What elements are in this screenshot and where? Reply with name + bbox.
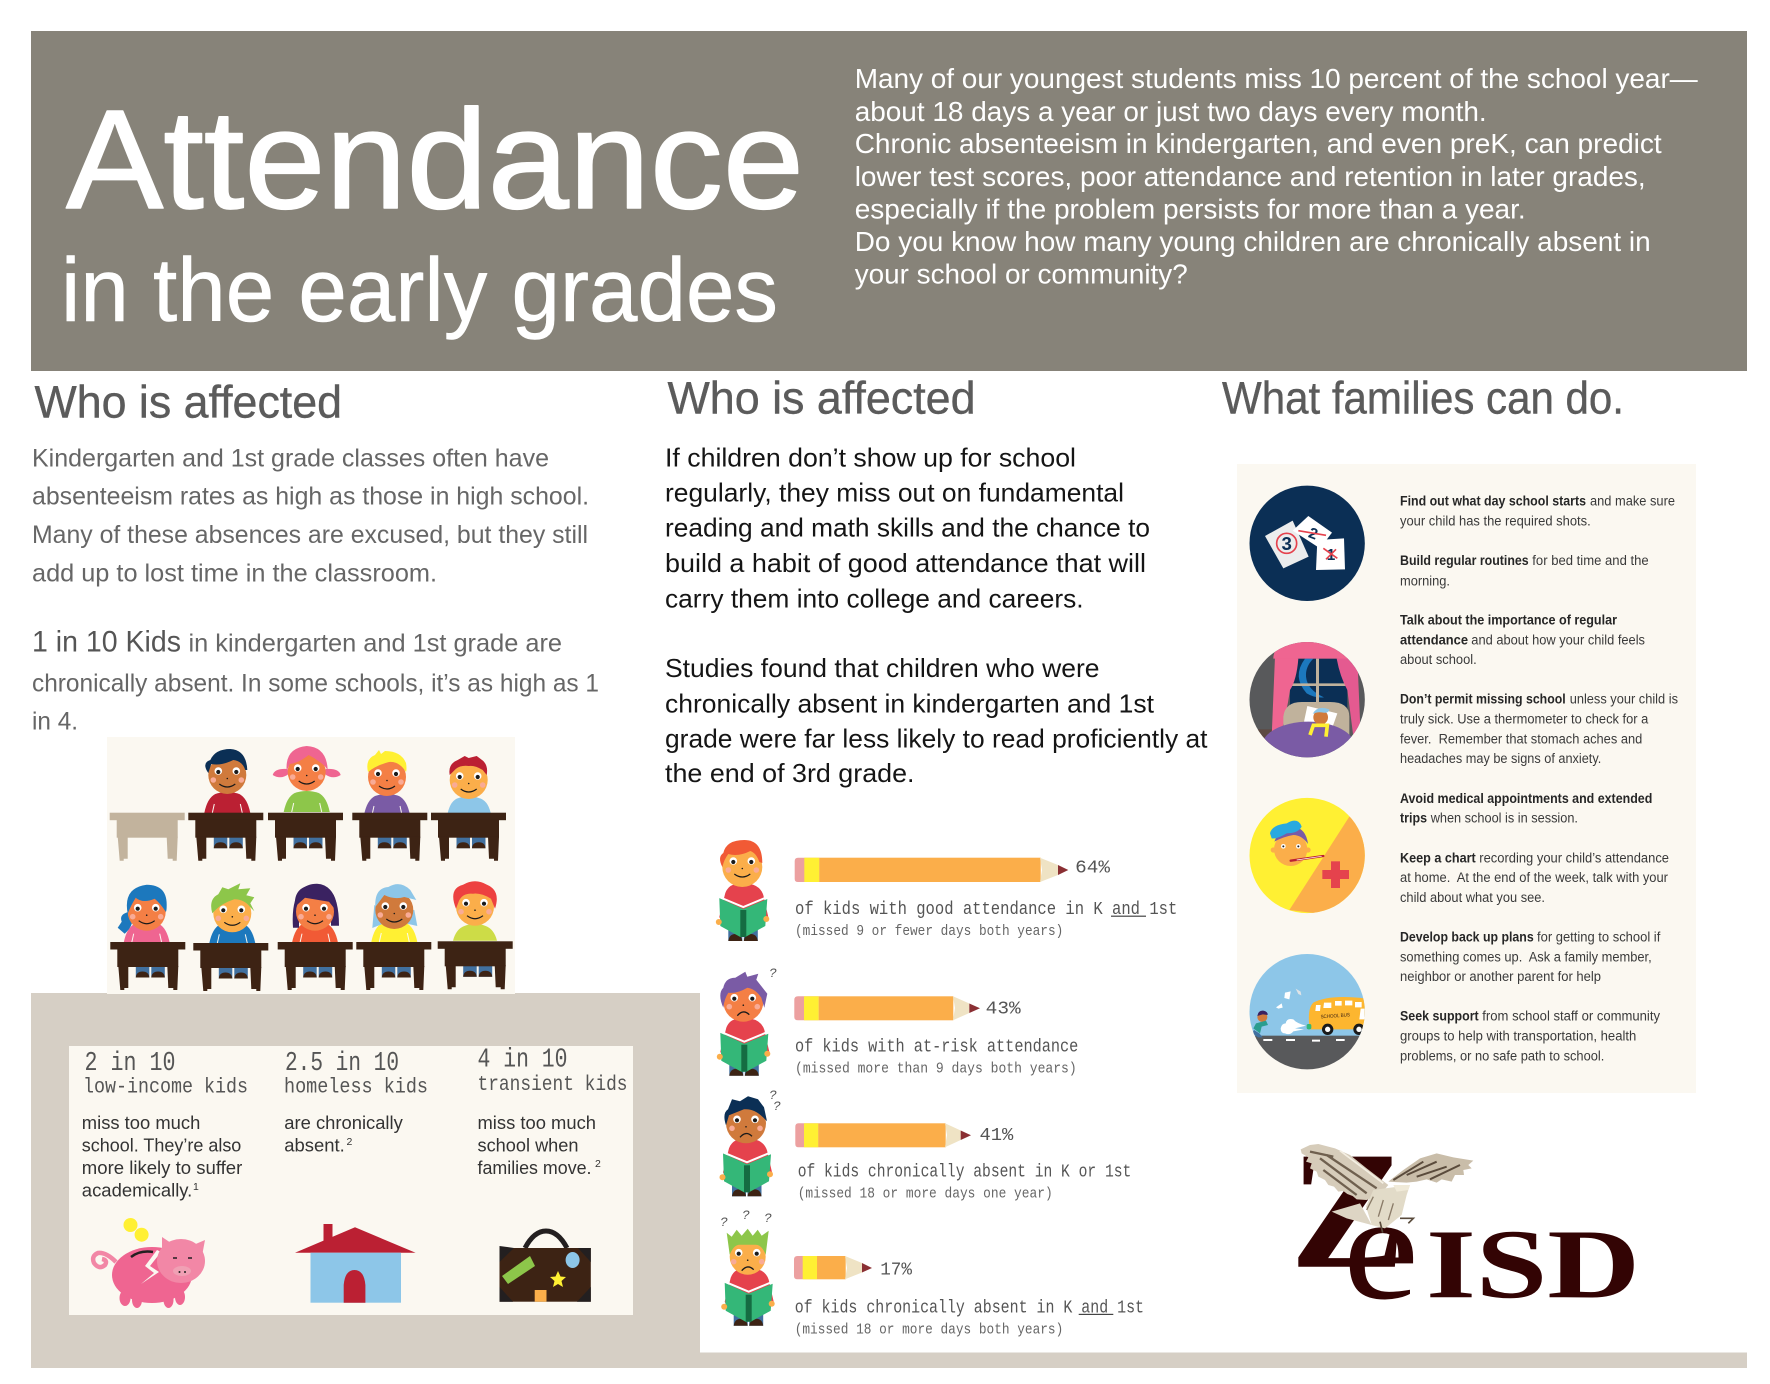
intro text: Do you know how many young children are chronically absent in bbox=[855, 226, 1651, 257]
stat: homeless kids: 2.5 in 10 bbox=[285, 1049, 399, 1079]
logo letters: Z bbox=[1290, 1118, 1406, 1304]
icon: sick child in bed circle bbox=[1250, 642, 1365, 758]
student 6 bbox=[209, 883, 255, 943]
stat: homeless kids: absent. bbox=[284, 1134, 345, 1155]
intro text: lower test scores, poor attendance and retention in later grades, bbox=[855, 161, 1646, 192]
stat: homeless kids: 2 bbox=[346, 1136, 352, 1148]
question mark: ? bbox=[769, 966, 777, 981]
icon: calendar circle: 1 bbox=[1327, 547, 1336, 564]
caption: good attendance: (missed 9 or fewer days both years) bbox=[795, 923, 1063, 940]
stat: low-income kids: school. They’re also bbox=[82, 1134, 241, 1155]
tip: talk about the importance of regular attendance: Talk about the importance of regular bbox=[1400, 613, 1618, 628]
tips text bbox=[1400, 494, 1678, 1063]
student 2 bbox=[273, 746, 341, 812]
caption: chronically absent K or 1st: of kids chronically absent in K or 1st bbox=[798, 1162, 1131, 1182]
tip: don't permit missing school: Don’t permit missing school bbox=[1400, 692, 1566, 707]
stat: low-income kids: 2 in 10 bbox=[84, 1049, 176, 1079]
tip: avoid medical appointments bbox=[1400, 791, 1652, 826]
icon: reading child, upset bbox=[721, 1229, 775, 1326]
heading: who is affected (left): Who is affected bbox=[34, 377, 342, 428]
middle body text: Studies found that children who were bbox=[665, 653, 1100, 683]
stat: transient kids: families move. bbox=[478, 1157, 592, 1178]
logo: Zeeland ISD mark with eagle bbox=[1290, 1118, 1640, 1331]
student 9 bbox=[453, 881, 497, 941]
stat: homeless kids bbox=[284, 1049, 428, 1155]
stat: low-income kids: academically. bbox=[82, 1180, 192, 1201]
student 8 bbox=[371, 884, 417, 942]
stat: homeless kids: homeless kids bbox=[284, 1077, 428, 1100]
left body text: add up to lost time in the classroom. bbox=[32, 559, 437, 587]
caption: good attendance bbox=[795, 900, 1177, 940]
caption: at-risk attendance: (missed more than 9 days both years) bbox=[795, 1060, 1077, 1077]
middle body text: reading and math skills and the chance to bbox=[665, 512, 1150, 542]
middle body text: regularly, they miss out on fundamental bbox=[665, 478, 1124, 508]
tip: avoid medical appointments: Avoid medical appointments and extended bbox=[1400, 791, 1652, 806]
banner background bbox=[31, 31, 1747, 371]
pencil bar 43% bbox=[794, 996, 980, 1020]
tip: build regular routines: morning. bbox=[1400, 573, 1450, 588]
tip: build regular routines: Build regular routines bbox=[1400, 553, 1529, 568]
icon: piggy bank bbox=[93, 1218, 205, 1308]
icon: reading child, confused bbox=[720, 1096, 773, 1196]
intro text: about 18 days a year or just two days every month. bbox=[855, 96, 1487, 127]
icon: calendar circle bbox=[1249, 486, 1365, 601]
student 3 bbox=[364, 750, 410, 815]
question marks: ? bbox=[742, 1208, 750, 1223]
chart row: at-risk attendance 43% bbox=[717, 966, 1078, 1077]
tip: don't permit missing school bbox=[1400, 692, 1678, 766]
tip: keep a chart: child about what you see. bbox=[1400, 890, 1545, 905]
tip: talk about the importance of regular attendance bbox=[1400, 613, 1645, 667]
middle body text: the end of 3rd grade. bbox=[665, 758, 914, 788]
tip: find out what day school starts bbox=[1400, 494, 1675, 529]
logo letters bbox=[1290, 1118, 1640, 1331]
tip: talk about the importance of regular attendance: attendance bbox=[1400, 632, 1468, 647]
icon: fever thermometer circle bbox=[1250, 798, 1365, 914]
question marks: ? bbox=[764, 1211, 772, 1226]
stat: low-income kids bbox=[82, 1049, 248, 1201]
caption: chronically absent K and 1st: (missed 18 or more days both years) bbox=[795, 1321, 1063, 1338]
stat: low-income kids: miss too much bbox=[82, 1112, 200, 1133]
tip: develop back up plans: for getting to school if bbox=[1537, 929, 1661, 944]
middle body text bbox=[665, 442, 1208, 788]
icon: school bus circle: SCHOOL BUS bbox=[1320, 1012, 1351, 1020]
student 7 bbox=[292, 884, 339, 943]
value 41%: 41% bbox=[980, 1126, 1014, 1146]
question marks bbox=[769, 1088, 781, 1114]
tip: find out what day school starts: Find out what day school starts bbox=[1400, 494, 1586, 509]
empty desk bbox=[110, 813, 185, 861]
middle body text: carry them into college and careers. bbox=[665, 584, 1084, 614]
stat: homeless kids: are chronically bbox=[284, 1112, 404, 1133]
value 43%: 43% bbox=[986, 1000, 1021, 1020]
middle body text: If children don’t show up for school bbox=[665, 442, 1076, 472]
stat: low-income kids: more likely to suffer bbox=[82, 1157, 242, 1178]
value 17%: 17% bbox=[880, 1260, 912, 1280]
caption: chronically absent K or 1st: (missed 18 or more days one year) bbox=[798, 1185, 1053, 1202]
value 64%: 64% bbox=[1075, 859, 1110, 879]
tip: keep a chart bbox=[1400, 850, 1669, 905]
tip: seek support: Seek support bbox=[1400, 1009, 1479, 1024]
tip: don't permit missing school: truly sick. Use a thermometer to check for a bbox=[1400, 712, 1649, 727]
student 4 bbox=[448, 756, 491, 813]
tip: keep a chart: Keep a chart bbox=[1400, 850, 1476, 865]
statistic: 1 in 10 kids: in 4. bbox=[32, 708, 78, 736]
question marks: ? bbox=[769, 1088, 777, 1103]
left body text: absenteeism rates as high as those in high school. bbox=[32, 482, 589, 510]
tip: develop back up plans: something comes up. Ask a family member, bbox=[1400, 949, 1652, 964]
pencil bar 64% bbox=[795, 858, 1068, 882]
chart row: chronically absent K or 1st 41% bbox=[720, 1088, 1131, 1202]
icon: house bbox=[295, 1224, 416, 1303]
tip: develop back up plans: neighbor or another parent for help bbox=[1400, 969, 1601, 984]
title line: in the early grades: in the early grades bbox=[61, 241, 778, 341]
stat: low-income kids: 1 bbox=[193, 1181, 199, 1193]
middle body text: chronically absent in kindergarten and 1st bbox=[665, 688, 1155, 718]
tip: talk about the importance of regular attendance: and about how your child feels bbox=[1471, 632, 1645, 647]
tip: talk about the importance of regular attendance: about school. bbox=[1400, 652, 1477, 667]
stat: transient kids: 2 bbox=[595, 1158, 601, 1170]
tip: seek support: groups to help with transportation, health bbox=[1400, 1029, 1636, 1044]
middle body text: build a habit of good attendance that will bbox=[665, 548, 1146, 578]
tip: develop back up plans: Develop back up plans bbox=[1400, 929, 1534, 944]
caption: chronically absent K or 1st bbox=[798, 1162, 1131, 1202]
tip: seek support: from school staff or community bbox=[1482, 1009, 1660, 1024]
intro text: Many of our youngest students miss 10 percent of the school year— bbox=[855, 63, 1698, 94]
tip: keep a chart: recording your child’s attendance bbox=[1479, 850, 1669, 865]
icon: reading child, worried bbox=[717, 972, 770, 1076]
caption: at-risk attendance: of kids with at-risk attendance bbox=[795, 1038, 1078, 1058]
title line: Attendance: Attendance bbox=[66, 80, 804, 238]
caption: chronically absent K and 1st: of kids chronically absent in K and 1st bbox=[795, 1298, 1144, 1318]
tip: build regular routines bbox=[1400, 553, 1649, 588]
panel: family tips bbox=[1237, 464, 1696, 1093]
icon: reading child, happy bbox=[716, 840, 769, 941]
tip: don't permit missing school: unless your child is bbox=[1570, 692, 1678, 707]
statistic: 1 in 10 kids: in kindergarten and 1st grade are bbox=[188, 630, 562, 658]
beige background block bbox=[31, 993, 1747, 1368]
logo letters: ISD bbox=[1426, 1210, 1640, 1319]
title bbox=[61, 80, 804, 341]
student 1 bbox=[204, 749, 250, 813]
tip: keep a chart: at home. At the end of the week, talk with your bbox=[1400, 870, 1668, 885]
intro text: your school or community? bbox=[855, 258, 1188, 290]
student 5 bbox=[118, 885, 170, 943]
tip: find out what day school starts: and make sure bbox=[1590, 494, 1675, 509]
caption: good attendance: of kids with good attendance in K and 1st bbox=[795, 900, 1177, 920]
statistic: 1 in 10 kids bbox=[32, 626, 599, 736]
tip: develop back up plans bbox=[1400, 929, 1661, 984]
classroom illustration bbox=[107, 737, 515, 994]
question marks: ? bbox=[720, 1215, 728, 1230]
stat: transient kids: miss too much bbox=[478, 1112, 596, 1133]
stat: transient kids: 4 in 10 bbox=[478, 1046, 568, 1076]
pencil bar 17% bbox=[794, 1256, 872, 1279]
icon: school bus circle bbox=[1250, 954, 1365, 1070]
statistic: 1 in 10 kids: 1 in 10 Kids bbox=[32, 626, 181, 658]
question marks bbox=[720, 1208, 772, 1230]
tip: avoid medical appointments: when school is in session. bbox=[1430, 811, 1578, 826]
intro text: especially if the problem persists for more than a year. bbox=[855, 194, 1526, 224]
logo letters: e bbox=[1343, 1165, 1419, 1331]
stat: transient kids: school when bbox=[478, 1134, 578, 1155]
question marks: ? bbox=[773, 1099, 781, 1114]
pencil bar 41% bbox=[795, 1123, 971, 1147]
left body text: Many of these absences are excused, but they still bbox=[32, 521, 588, 549]
eagle bbox=[1301, 1144, 1473, 1233]
tip: seek support: problems, or no safe path to school. bbox=[1400, 1048, 1604, 1063]
statistic: 1 in 10 kids: chronically absent. In some schools, it’s as high as 1 bbox=[32, 669, 599, 697]
intro text bbox=[855, 63, 1698, 290]
panel: at-risk groups bbox=[69, 1046, 633, 1315]
icon: calendar circle: 2 bbox=[1306, 525, 1320, 544]
icon: suitcase bbox=[500, 1231, 591, 1302]
tip: build regular routines: for bed time and the bbox=[1532, 553, 1649, 568]
intro text: Chronic absenteeism in kindergarten, and even preK, can predict bbox=[855, 128, 1662, 159]
chart row: good attendance 64% bbox=[716, 840, 1177, 941]
tip: find out what day school starts: your child has the required shots. bbox=[1400, 514, 1591, 529]
left body text bbox=[32, 444, 589, 587]
caption: chronically absent K and 1st bbox=[795, 1298, 1144, 1338]
stat: transient kids: transient kids bbox=[478, 1074, 628, 1097]
heading: what families can do: What families can do. bbox=[1222, 372, 1624, 424]
caption: at-risk attendance bbox=[795, 1038, 1078, 1077]
left body text: Kindergarten and 1st grade classes often have bbox=[32, 444, 549, 472]
heading: who is affected (middle): Who is affected bbox=[668, 372, 976, 423]
chart row: chronically absent K and 1st 17% bbox=[720, 1208, 1144, 1338]
tip: avoid medical appointments: trips bbox=[1400, 811, 1427, 826]
stat: transient kids bbox=[478, 1046, 628, 1178]
tip: seek support bbox=[1400, 1009, 1660, 1063]
stat: low-income kids: low-income kids bbox=[83, 1077, 248, 1100]
tip: don't permit missing school: fever. Remember that stomach aches and bbox=[1400, 731, 1642, 746]
icon: calendar circle: 3 bbox=[1281, 533, 1292, 554]
tip: don't permit missing school: headaches may be signs of anxiety. bbox=[1400, 751, 1601, 766]
middle body text: grade were far less likely to read proficiently at bbox=[665, 724, 1208, 754]
